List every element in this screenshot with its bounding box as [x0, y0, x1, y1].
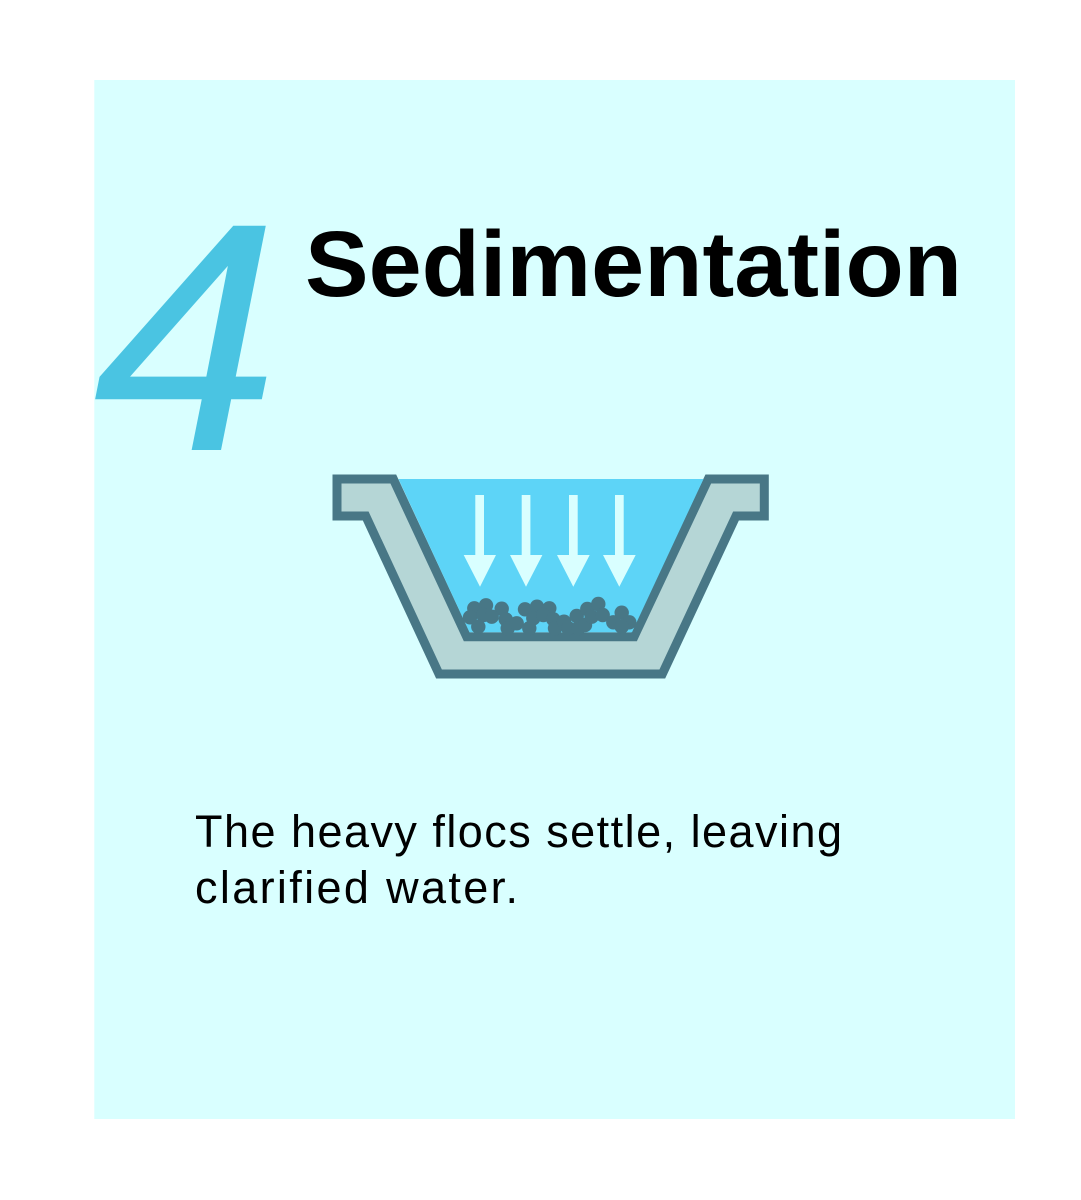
description text [195, 806, 842, 913]
description text: clarified water. [195, 862, 518, 913]
basin wall [337, 479, 764, 674]
settled flocs [463, 597, 636, 636]
step number 4: 4 [93, 156, 279, 520]
settling arrows [464, 495, 636, 587]
icon: sedimentation basin [337, 479, 764, 674]
panel: background [94, 80, 1015, 1119]
water [398, 479, 704, 632]
title: Sedimentation [305, 212, 962, 316]
description text: The heavy flocs settle, leaving [195, 806, 842, 857]
